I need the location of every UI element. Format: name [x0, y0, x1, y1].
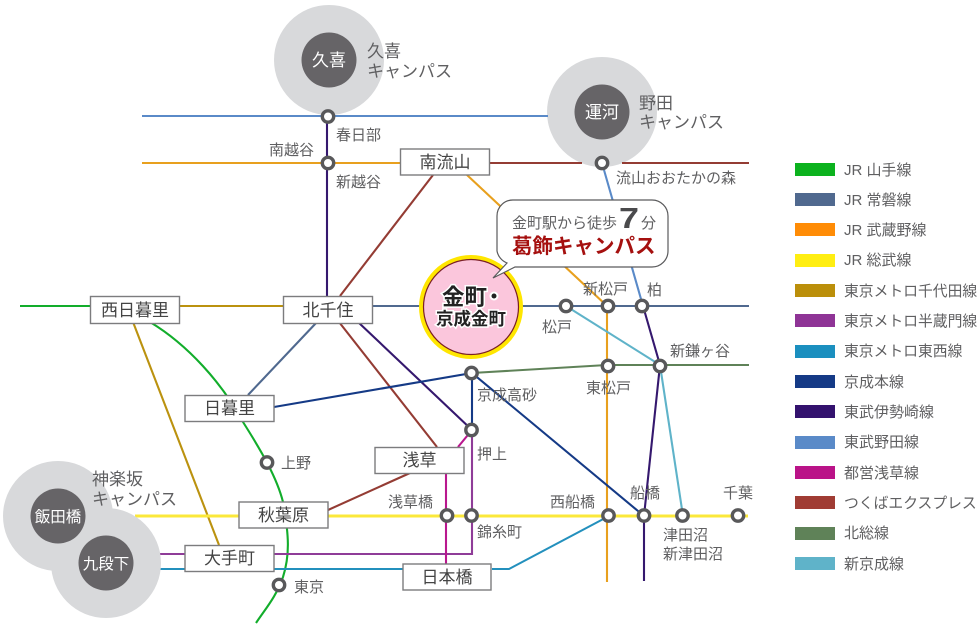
legend: Keisei Main: 京成本線 — [844, 374, 904, 391]
campus label: Noda: 野田 — [639, 94, 673, 113]
station labels: 新津田沼 — [663, 546, 723, 563]
legend: JR Musashino — [795, 222, 927, 239]
legend: JR Musashino: JR 武蔵野線 — [844, 222, 927, 239]
campus circles: Kagurazaka: 九段下 — [83, 555, 129, 573]
line: JR Musashino — [142, 163, 607, 582]
station labels — [269, 127, 753, 596]
campus label: Noda: キャンパス — [639, 113, 724, 132]
station labels: 新鎌ヶ谷 — [670, 343, 730, 360]
legend: Tokyo Metro Tozai: 東京メトロ東西線 — [844, 343, 963, 360]
station labels: 上野 — [281, 455, 311, 472]
line: Tobu Isesaki — [327, 116, 660, 581]
station labels: 春日部 — [336, 127, 381, 144]
campus circle: Noda: 運河 — [585, 103, 619, 122]
line: Tobu Noda — [142, 116, 643, 306]
legend: JR Yamanote — [795, 162, 912, 179]
station labels: 錦糸町 — [477, 524, 522, 541]
line: Tokyo Metro Tozai — [160, 516, 609, 569]
legend: JR Joban — [795, 192, 912, 209]
legend: JR Yamanote: JR 山手線 — [844, 162, 912, 179]
line: JR Joban — [248, 306, 749, 395]
line: Tsukuba Express — [328, 163, 749, 510]
station box: Nihombashi: 日本橋 — [422, 568, 472, 587]
station labels: 新越谷 — [336, 174, 381, 191]
legend: JR Sobu: JR 総武線 — [844, 252, 912, 269]
legend: Tobu Isesaki — [795, 404, 934, 421]
station box: Nihombashi — [403, 564, 491, 590]
station box: Kita-Senju — [284, 296, 372, 324]
station labels: 浅草橋 — [388, 494, 433, 511]
station labels: 津田沼 — [663, 527, 708, 544]
station labels: 押上 — [477, 446, 507, 463]
campus label: Kuki: キャンパス — [367, 62, 452, 81]
legend: Tokyo Metro Hanzomon: 東京メトロ半蔵門線 — [844, 313, 977, 330]
callout: Katsushika campus: 分 — [641, 215, 656, 232]
legend: Shin-Keisei — [795, 556, 904, 573]
legend: Tokyo Metro Tozai — [795, 343, 963, 360]
line: Tokyo Metro Hanzomon — [160, 430, 472, 554]
line: Keisei Main — [274, 373, 644, 516]
station markers — [261, 111, 744, 591]
station box: Asakusa — [375, 448, 464, 474]
campus circle: Kuki: 久喜 — [312, 51, 346, 70]
station box: Nishi-Nippori — [90, 296, 180, 324]
station labels: 柏 — [647, 282, 662, 299]
station box: Minami-Nagareyama: 南流山 — [420, 153, 470, 172]
campus circles: Kagurazaka — [3, 461, 161, 618]
station labels: 東京 — [294, 579, 324, 596]
campus label: Kuki: 久喜 — [367, 42, 401, 61]
line: Hokuso — [472, 365, 749, 373]
campus circle: Kuki — [274, 5, 384, 115]
station labels: 西船橋 — [550, 494, 595, 511]
station labels: 千葉 — [723, 485, 753, 502]
station labels: 京成高砂 — [477, 387, 537, 404]
station labels: 船橋 — [630, 485, 660, 502]
highlighted station: Kanamachi: 金町 — [442, 285, 487, 310]
highlighted station: Kanamachi — [419, 255, 523, 359]
highlighted station: Kanamachi: 京成金町 — [436, 309, 506, 329]
line: Toei Asakusa — [446, 430, 472, 564]
legend: JR Sobu — [795, 252, 912, 269]
legend: Tsukuba Express — [795, 495, 977, 512]
station labels: 松戸 — [542, 319, 572, 336]
station labels: 南越谷 — [269, 142, 314, 159]
campus label: Kagurazaka: キャンパス — [92, 490, 177, 509]
legend: Shin-Keisei: 新京成線 — [844, 556, 904, 573]
legend: Tokyo Metro Chiyoda: 東京メトロ千代田線 — [844, 283, 977, 300]
station box: Akihabara — [239, 502, 328, 528]
station box: Nishi-Nippori: 西日暮里 — [101, 301, 169, 320]
callout: Katsushika campus: 葛飾キャンパス — [512, 235, 656, 258]
station box: Minami-Nagareyama — [400, 149, 490, 175]
legend: Tobu Noda: 東武野田線 — [844, 434, 919, 451]
station box: Asakusa: 浅草 — [402, 451, 436, 470]
legend: Tsukuba Express: つくばエクスプレス — [844, 495, 977, 512]
campus circle: Noda — [547, 57, 657, 167]
line: JR Yamanote — [20, 306, 288, 623]
callout: Katsushika campus: 7 — [619, 203, 639, 235]
station box: Kita-Senju: 北千住 — [302, 301, 354, 320]
line: Tokyo Metro Chiyoda — [133, 306, 283, 545]
line: Shin-Keisei — [566, 306, 683, 516]
legend: Tobu Noda — [795, 434, 919, 451]
station box: Otemachi: 大手町 — [204, 549, 255, 568]
callout: Katsushika campus: 金町駅から徒歩 — [512, 215, 617, 232]
legend: Hokuso — [795, 525, 889, 542]
legend: Hokuso: 北総線 — [844, 525, 889, 542]
legend: Tobu Isesaki: 東武伊勢崎線 — [844, 404, 934, 421]
station box: Akihabara: 秋葉原 — [258, 506, 309, 525]
legend: Keisei Main — [795, 374, 904, 391]
station box: Nippori — [185, 396, 274, 422]
callout: Katsushika campus — [493, 200, 668, 278]
station labels: 東松戸 — [586, 380, 631, 397]
station labels: 新松戸 — [583, 281, 628, 298]
legend: Tokyo Metro Chiyoda — [795, 283, 977, 300]
legend — [795, 162, 977, 573]
campus label: Kagurazaka: 神楽坂 — [92, 470, 143, 489]
legend: JR Joban: JR 常磐線 — [844, 192, 912, 209]
station labels: 流山おおたかの森 — [616, 170, 736, 187]
campus circles: Kagurazaka: 飯田橋 — [35, 508, 82, 526]
legend: Toei Asakusa — [795, 465, 919, 482]
legend: Tokyo Metro Hanzomon — [795, 313, 977, 330]
station box: Otemachi — [185, 546, 274, 572]
line: JR Sobu — [135, 514, 748, 518]
station box: Nippori: 日暮里 — [204, 399, 255, 418]
legend: Toei Asakusa: 都営浅草線 — [844, 465, 919, 482]
